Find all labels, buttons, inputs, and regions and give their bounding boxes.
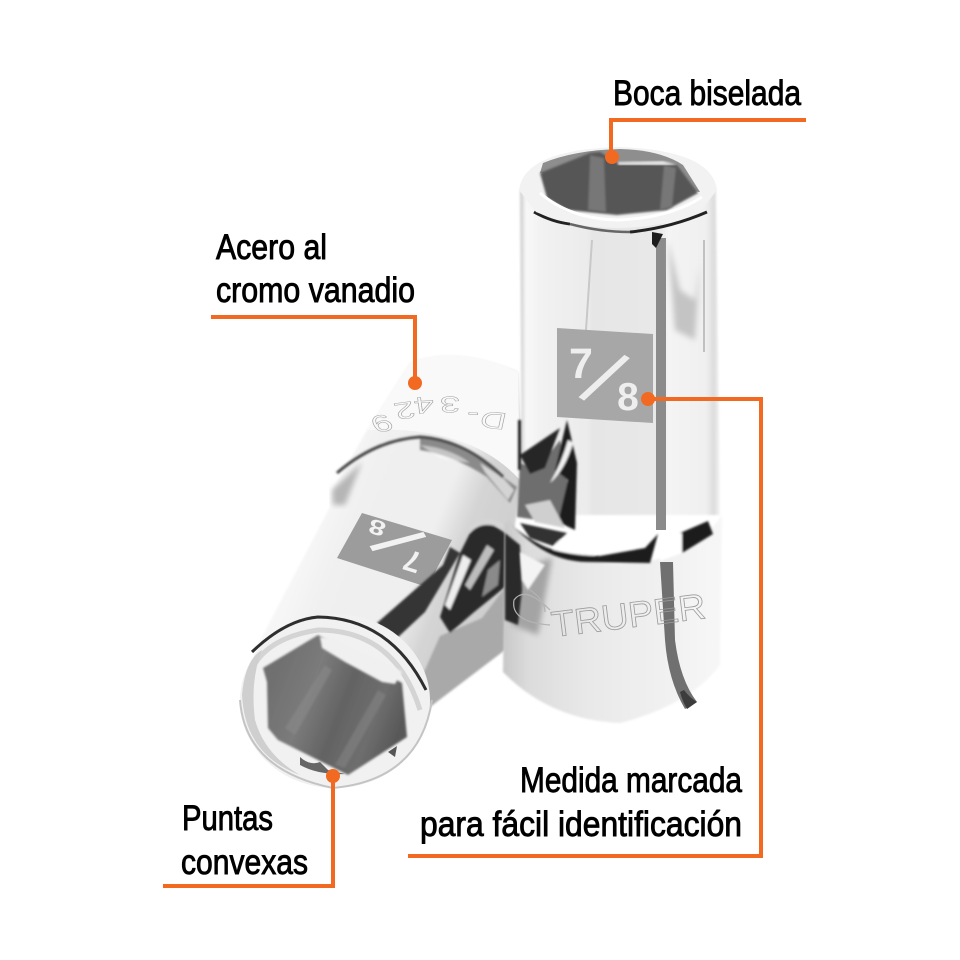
lying socket hex opening — [263, 635, 407, 775]
upright shoulder band — [507, 520, 713, 563]
lying socket shoulder band — [337, 437, 517, 503]
callout: Medida marcada: Medida marcada — [520, 761, 742, 800]
hex inner highlight — [320, 637, 402, 684]
left dark reflection — [517, 420, 577, 530]
callout: Puntas convexas: Puntas — [182, 799, 273, 838]
upright socket — [503, 147, 722, 723]
callout: Boca biselada — [605, 74, 806, 164]
size label upright — [557, 328, 653, 424]
callout: Medida marcada: para fácil identificación — [420, 805, 742, 844]
callout: Acero al cromo vanadio — [211, 228, 422, 390]
lying socket body — [250, 356, 522, 780]
size text upright: 7 — [569, 340, 593, 388]
size text upright: 8 — [617, 376, 639, 419]
engraved part number: D-3429 — [365, 391, 509, 437]
lower left shading — [512, 558, 552, 635]
size label lying — [337, 513, 452, 587]
upright socket opening — [540, 149, 700, 192]
callout: Medida marcada — [408, 392, 761, 856]
vertical reflection stripes — [656, 238, 666, 530]
size text lying: 7 — [400, 542, 425, 579]
upright socket lower section — [503, 515, 722, 723]
callout: Puntas convexas: convexas — [181, 843, 308, 882]
lying socket rear section — [367, 356, 520, 480]
engraved brand: TRUPER — [549, 585, 708, 645]
callout: Boca biselada: Boca biselada — [613, 74, 801, 113]
size text upright: / — [569, 335, 637, 424]
brand logo — [514, 590, 550, 625]
upright socket body — [520, 190, 720, 515]
callout: Acero al cromo vanadio: cromo vanadio — [216, 271, 415, 310]
upright socket rim — [534, 212, 570, 224]
lying socket dark reflections — [377, 519, 507, 707]
callout: Puntas convexas — [163, 769, 340, 886]
callout: Acero al cromo vanadio: Acero al — [216, 228, 327, 267]
size text lying: / — [356, 513, 437, 572]
lying socket rim — [240, 614, 430, 788]
lying socket — [240, 356, 522, 788]
size text lying: 8 — [366, 514, 389, 540]
